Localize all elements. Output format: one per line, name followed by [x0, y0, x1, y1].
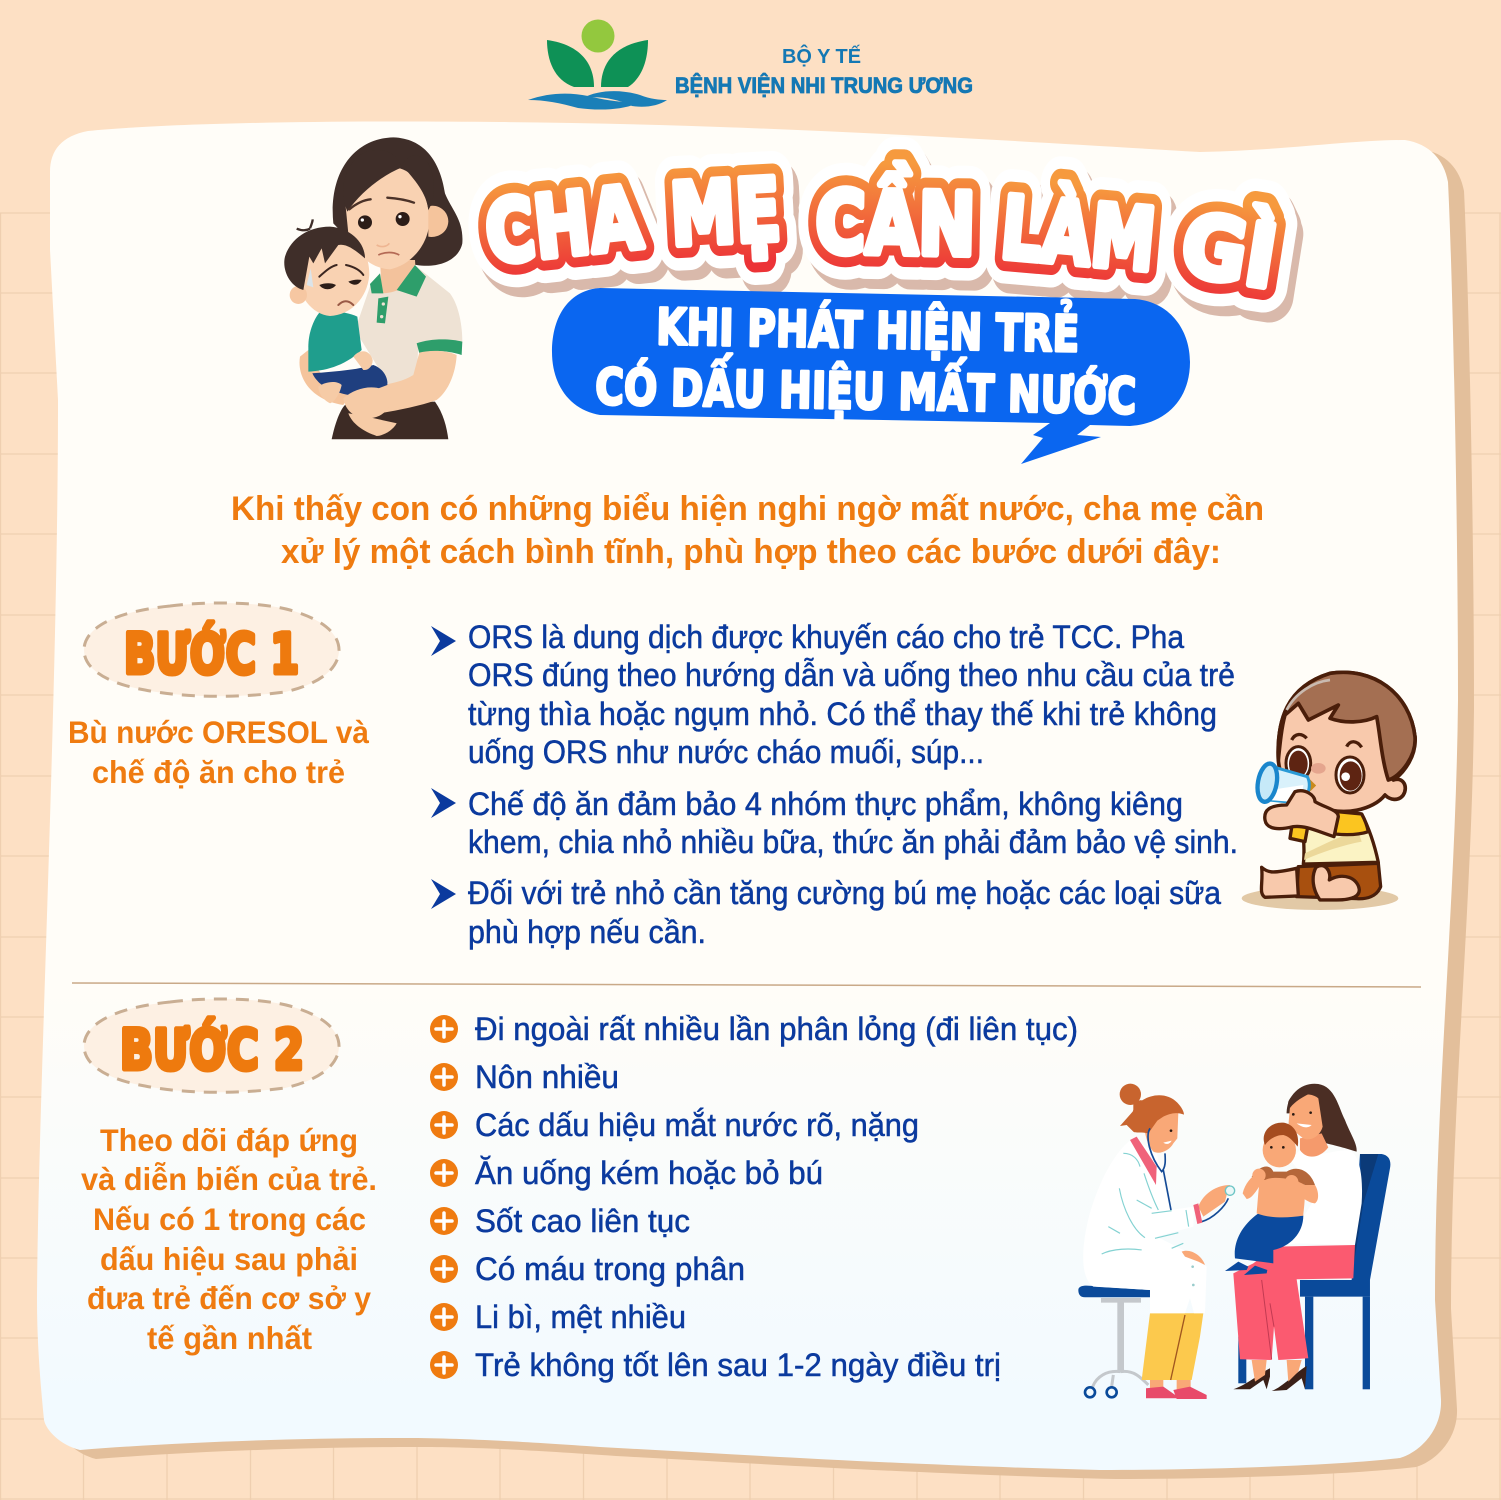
- step 2 badge: BƯỚC 2: [120, 1018, 304, 1082]
- list text: Chế độ ăn đảm bảo 4 nhóm thực phẩm, không kiêng: [468, 786, 1183, 822]
- subtitle speech bubble: KHI PHÁT HIỆN TRẺ: [656, 292, 1080, 363]
- title: cha me can lam gi: MẸ: [668, 160, 783, 266]
- title: cha me can lam gi: MẸ: [668, 160, 783, 266]
- list text: Đi ngoài rất nhiều lần phân lỏng (đi liên tục): [475, 1011, 1078, 1047]
- logo text: BỘ Y TẾ: [782, 44, 861, 68]
- step 2 description: [81, 1122, 377, 1356]
- title: cha me can lam gi: GÌ: [1181, 204, 1289, 318]
- logo: national children's hospital: [528, 20, 973, 110]
- title: cha me can lam gi: CHA: [487, 178, 653, 294]
- step 1 description: chế độ ăn cho trẻ: [92, 754, 345, 790]
- list text: Ăn uống kém hoặc bỏ bú: [475, 1155, 823, 1191]
- title: cha me can lam gi: LÀM: [1003, 188, 1165, 301]
- step 2 badge: [84, 999, 339, 1092]
- step 1 badge: [84, 603, 339, 696]
- list text: Sốt cao liên tục: [475, 1203, 690, 1239]
- list text: từng thìa hoặc ngụm nhỏ. Có thể thay thế khi trẻ không: [468, 696, 1217, 732]
- title: cha me can lam gi: LÀM: [997, 178, 1159, 291]
- intro text: [231, 490, 1264, 571]
- step 2 description: đưa trẻ đến cơ sở y: [87, 1280, 371, 1316]
- list text: [468, 619, 1238, 950]
- bullet chevrons: [431, 626, 456, 909]
- list text: Li bì, mệt nhiều: [475, 1299, 686, 1335]
- step 2 description: dấu hiệu sau phải: [100, 1241, 358, 1277]
- logo text: [675, 44, 973, 98]
- list text: phù hợp nếu cần.: [468, 914, 706, 950]
- child: [1225, 1123, 1318, 1275]
- subtitle speech bubble: CÓ DẤU HIỆU MẤT NƯỚC: [595, 351, 1137, 425]
- list text: Trẻ không tốt lên sau 1-2 ngày điều trị: [475, 1347, 1001, 1383]
- title: cha me can lam gi: GÌ: [1175, 194, 1283, 308]
- title: cha me can lam gi: MẸ: [668, 160, 783, 266]
- subtitle speech bubble: [552, 288, 1190, 464]
- list text: Các dấu hiệu mắt nước rõ, nặng: [475, 1107, 919, 1143]
- step 2 description: tế gần nhất: [147, 1320, 312, 1356]
- title: cha me can lam gi: MẸ: [674, 170, 789, 276]
- step 1 description: Bù nước ORESOL và: [68, 714, 369, 750]
- step 2 description: Nếu có 1 trong các: [93, 1201, 366, 1237]
- title: cha me can lam gi: GÌ: [1175, 194, 1283, 308]
- doctor: [1083, 1084, 1235, 1399]
- title: cha me can lam gi: CHA: [481, 168, 647, 284]
- step 2 list: [430, 1011, 1078, 1383]
- mother: [1233, 1084, 1362, 1391]
- logo icon: [528, 20, 667, 110]
- step 1 description: [68, 714, 369, 790]
- title: cha me can lam gi: [481, 160, 1289, 318]
- step 2 description: Theo dõi đáp ứng: [100, 1122, 358, 1158]
- list text: ORS là dung dịch được khuyến cáo cho trẻ TCC. Pha: [468, 619, 1184, 655]
- title: cha me can lam gi: CẦN: [815, 162, 977, 276]
- list text: Đối với trẻ nhỏ cần tăng cường bú mẹ hoặc các loại sữa: [468, 875, 1221, 911]
- chair: [1238, 1154, 1390, 1389]
- title: cha me can lam gi: CẦN: [815, 162, 977, 276]
- list text: [475, 1011, 1078, 1383]
- illustration: doctor examining child on mother's lap: [1078, 1084, 1390, 1399]
- plus icons: [430, 1015, 458, 1379]
- intro text: xử lý một cách bình tĩnh, phù hợp theo các bước dưới đây:: [281, 533, 1221, 571]
- title: cha me can lam gi: LÀM: [997, 178, 1159, 291]
- list text: Có máu trong phân: [475, 1251, 745, 1287]
- step 1 badge: BƯỚC 1: [124, 622, 299, 686]
- illustration: baby drinking from bottle: [1242, 672, 1415, 910]
- title: cha me can lam gi: CẦN: [821, 172, 983, 286]
- stool: [1078, 1286, 1150, 1397]
- list text: khem, chia nhỏ nhiều bữa, thức ăn phải đảm bảo vệ sinh.: [468, 824, 1238, 860]
- title: cha me can lam gi: CẦN: [815, 162, 977, 276]
- step 2 description: và diễn biến của trẻ.: [81, 1161, 377, 1197]
- intro text: Khi thấy con có những biểu hiện nghi ngờ mất nước, cha mẹ cần: [231, 490, 1264, 528]
- title: cha me can lam gi: CHA: [481, 168, 647, 284]
- list text: uống ORS như nước cháo muối, súp...: [468, 734, 984, 770]
- title: cha me can lam gi: LÀM: [997, 178, 1159, 291]
- section divider: [72, 983, 1421, 987]
- step 1 list: [431, 619, 1238, 950]
- list text: Nôn nhiều: [475, 1059, 619, 1095]
- title: cha me can lam gi: GÌ: [1175, 194, 1283, 308]
- title: cha me can lam gi: CHA: [481, 168, 647, 284]
- illustration: mother holding sick child: [284, 137, 462, 439]
- list text: ORS đúng theo hướng dẫn và uống theo nhu cầu của trẻ: [468, 657, 1235, 693]
- logo text: BỆNH VIỆN NHI TRUNG ƯƠNG: [675, 73, 973, 98]
